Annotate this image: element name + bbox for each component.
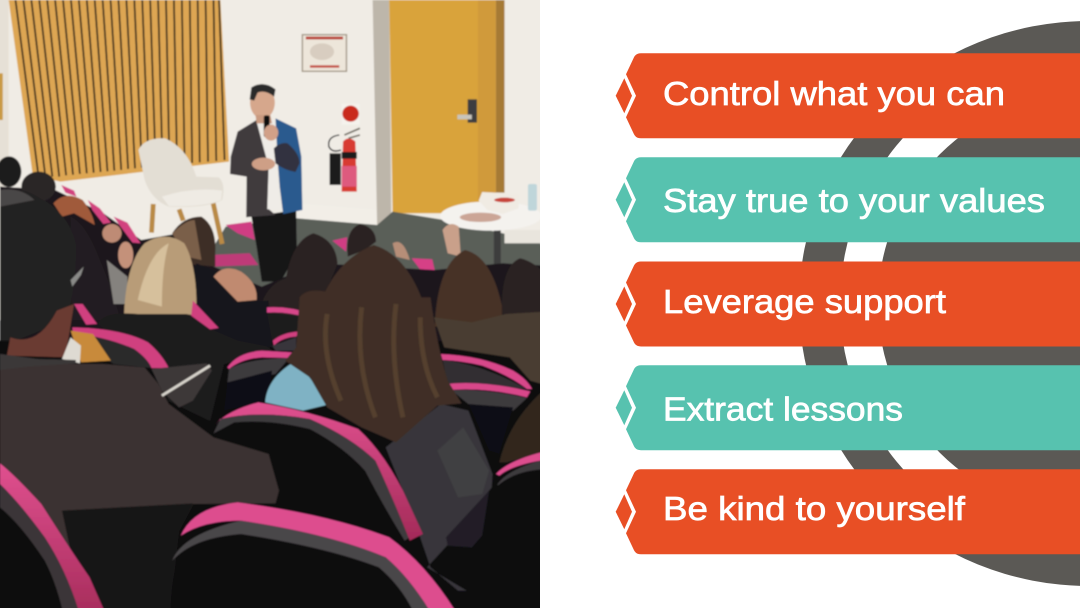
- diamond marker: [616, 494, 632, 529]
- label: Be kind to yourself: [663, 490, 966, 527]
- diamond marker: [616, 390, 632, 425]
- label: Control what you can: [663, 75, 1005, 112]
- armchair: [138, 138, 223, 244]
- decorative concentric ring and disc behind bars: [799, 21, 1080, 586]
- panel: photo of speaker addressing seated audience: [0, 0, 565, 608]
- diamond marker: [616, 182, 632, 217]
- side table with bowl and water bottle: [440, 184, 541, 272]
- bar: Extract lessons: [616, 365, 1080, 450]
- speaker in blazer holding microphone: [230, 84, 302, 282]
- label: Leverage support: [663, 283, 946, 320]
- bar: Leverage support: [616, 262, 1080, 346]
- label: Stay true to your values: [663, 182, 1045, 219]
- bar: Be kind to yourself: [616, 469, 1080, 554]
- diamond marker: [616, 286, 632, 322]
- back rows of audience: [0, 156, 565, 347]
- diamond marker: [616, 78, 632, 113]
- fire extinguisher and sign: [329, 104, 360, 192]
- foreground: audience members and pink theatre seats: [0, 291, 565, 608]
- room background: wall, slats, door and floor: [0, 0, 565, 320]
- wall sign: [302, 35, 346, 71]
- label: Extract lessons: [663, 391, 903, 428]
- bar: Control what you can: [616, 53, 1080, 138]
- bar: Stay true to your values: [616, 157, 1080, 242]
